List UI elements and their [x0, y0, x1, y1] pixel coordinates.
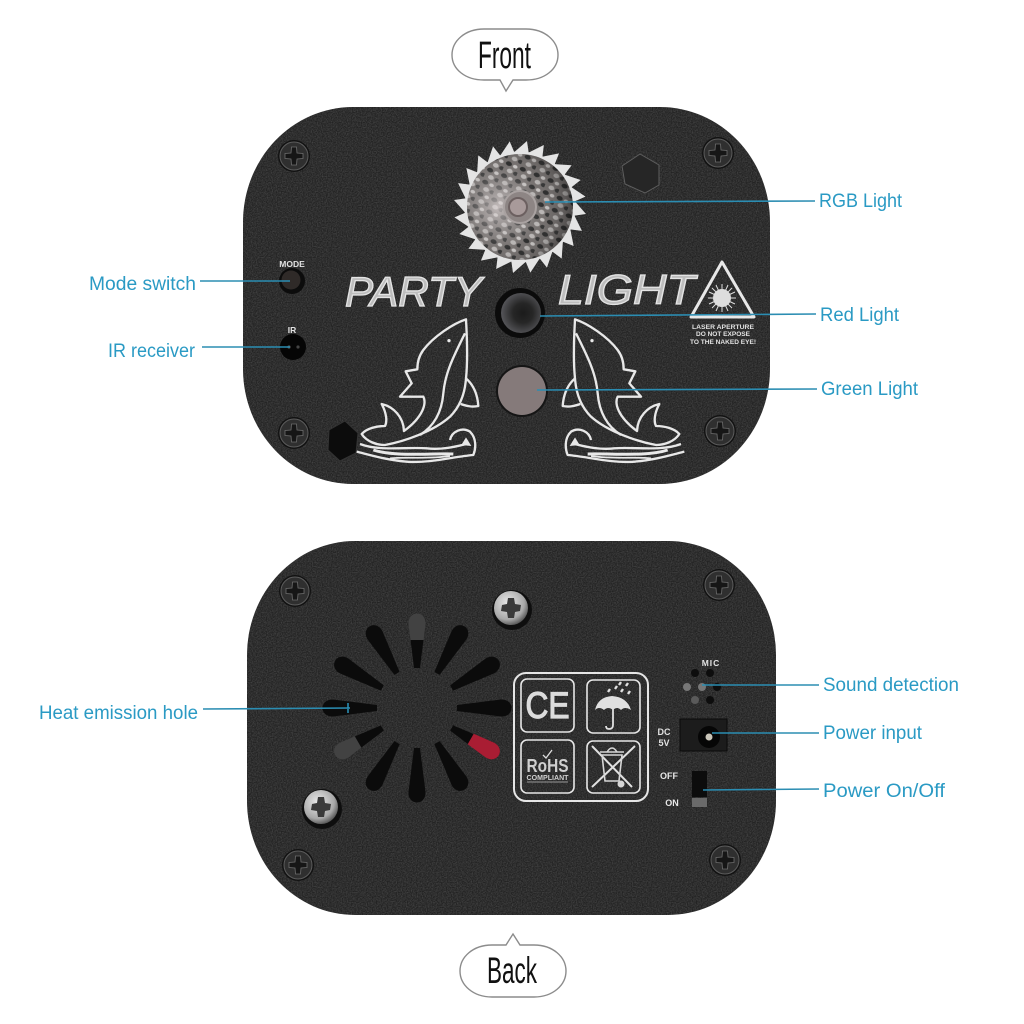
icon: right dolphin [563, 319, 684, 462]
panel body [247, 541, 776, 915]
icon: top hexagon recess [622, 154, 659, 193]
callout: Red Light: Red Light [820, 305, 900, 326]
MIC label and holes: MIC [702, 658, 720, 668]
mode button: MODE [279, 259, 305, 269]
power switch with OFF ON labels [660, 771, 707, 808]
RoHS mark: RoHS [526, 756, 568, 776]
icon: bottom left screw [282, 849, 314, 881]
warning text: TO THE NAKED EYE! [690, 339, 756, 346]
IR receiver window: IR [288, 325, 296, 335]
CE mark: CE [526, 685, 570, 726]
icon: bottom right screw [709, 844, 741, 876]
icon: left dolphin [357, 319, 478, 462]
warning text [690, 324, 756, 346]
panel: front of device [243, 107, 770, 484]
callout: Mode switch: Mode switch [89, 274, 196, 295]
icon: RGB light lens with sawtooth ring [454, 141, 586, 273]
IR receiver window [280, 325, 306, 360]
RoHS mark: COMPLIANT [526, 773, 569, 782]
icon: green laser aperture [496, 365, 548, 417]
icon: top right screw [702, 137, 734, 169]
word: PARTY: PARTY [345, 268, 485, 315]
icon: laser warning triangle [691, 262, 754, 317]
callout: Back [460, 934, 566, 997]
power switch with OFF ON labels: ON [665, 798, 679, 808]
certification marks box [514, 673, 648, 801]
word: LIGHT: LIGHT [558, 266, 699, 313]
callout: Heat emission hole [39, 703, 350, 724]
icon: bottom left screw [278, 417, 310, 449]
callout: Heat emission hole: Heat emission hole [39, 703, 198, 724]
icon: crossed out bin [587, 741, 640, 793]
icon: shiny lower screw [302, 789, 342, 829]
MIC label and holes [683, 658, 721, 704]
callout: Power input: Power input [823, 723, 923, 744]
power jack with DC 5V label [658, 719, 727, 751]
icon: red laser aperture [495, 288, 545, 338]
title: PARTY LIGHT lettering [345, 266, 699, 315]
callout: IR receiver: IR receiver [108, 341, 196, 362]
icon: bottom right screw [704, 415, 736, 447]
callout: RGB Light: RGB Light [819, 191, 903, 212]
callout: Front [452, 29, 558, 91]
warning text: DO NOT EXPOSE [696, 331, 751, 338]
callout: Power On/Off: Power On/Off [823, 781, 946, 802]
callout: Back: Back [487, 950, 537, 991]
RoHS mark [521, 740, 574, 793]
icon: umbrella keep dry [587, 680, 640, 733]
icon: shiny top screw [492, 590, 532, 630]
power jack with DC 5V label: DC [658, 727, 671, 737]
mode button [279, 259, 305, 294]
icon: bottom hexagon recess [328, 421, 358, 461]
callout: Green Light: Green Light [821, 379, 919, 400]
warning text: LASER APERTURE [692, 324, 755, 331]
power switch with OFF ON labels: OFF [660, 771, 678, 781]
power jack with DC 5V label: 5V [658, 738, 670, 748]
icon: top left screw [279, 575, 311, 607]
icon: top left screw [278, 140, 310, 172]
callout: Front: Front [478, 35, 531, 77]
callout: Sound detection: Sound detection [823, 675, 959, 696]
icon: top right screw [703, 569, 735, 601]
panel body [243, 107, 770, 484]
heat emission vents [322, 614, 512, 802]
panel: back of device [247, 541, 776, 915]
